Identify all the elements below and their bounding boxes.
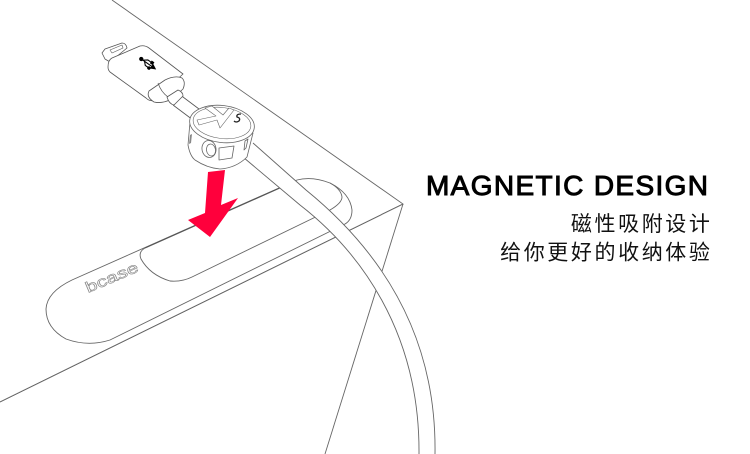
lid small mark	[234, 114, 241, 122]
micro USB connector	[102, 43, 203, 120]
subtitle line 2: 给你更好的收纳体验	[500, 242, 712, 264]
magnetic base pad	[46, 179, 352, 343]
pad recess	[140, 183, 342, 281]
lid chevron logo	[197, 106, 234, 128]
title: MAGNETIC DESIGN	[426, 170, 708, 201]
cable	[237, 143, 435, 454]
cable to connector	[173, 94, 203, 120]
clip lid	[187, 102, 257, 146]
front tab	[219, 146, 234, 160]
magnetic cable clip	[187, 102, 257, 169]
cable hole	[201, 139, 217, 159]
clip body	[188, 122, 253, 169]
metal tip	[102, 43, 127, 62]
plug body	[108, 46, 183, 101]
table edge redrawn over pad	[0, 204, 403, 402]
side slot	[189, 134, 192, 144]
red downward arrow	[188, 170, 238, 237]
icon: USB symbol	[138, 55, 158, 72]
logo: bcase: bcase	[83, 259, 141, 297]
strain relief	[148, 77, 184, 103]
subtitle line 1: 磁性吸附设计	[571, 213, 712, 236]
desk corner outline	[0, 0, 403, 454]
